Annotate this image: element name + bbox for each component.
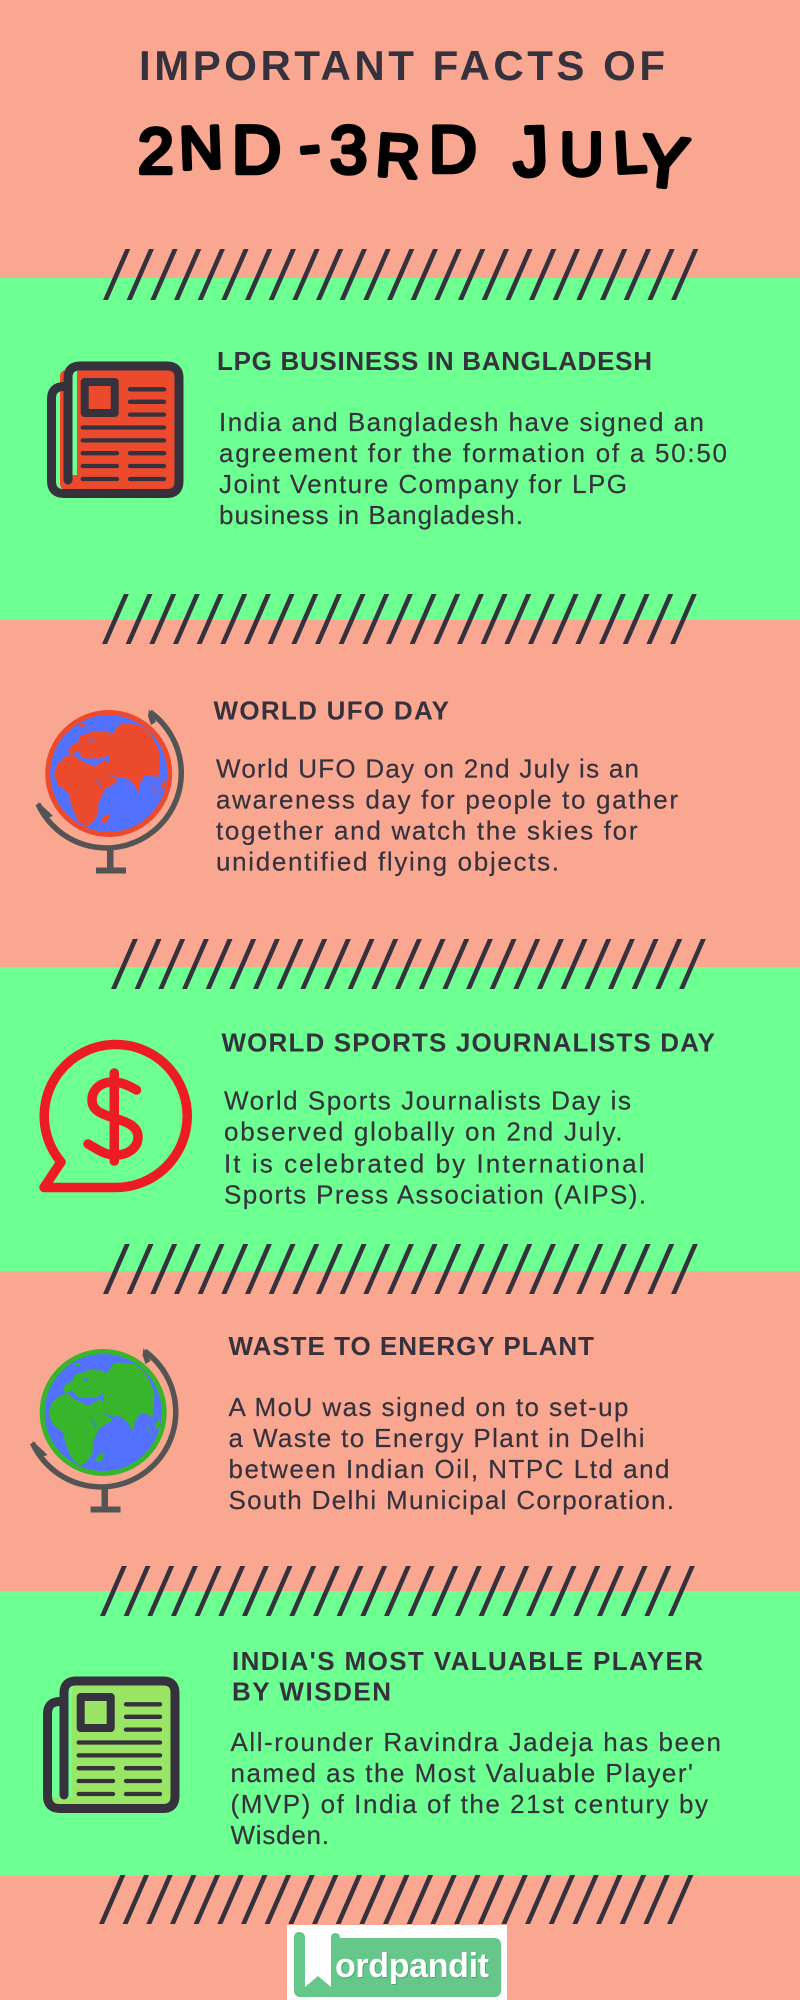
panel: Waste to Energy Plant [32,1331,674,1515]
slash divider 4 [114,1244,687,1294]
text block: India body: named as the Most Valuable Player' [230,1758,693,1788]
heading: World UFO Day: WORLD UFO DAY [214,696,449,726]
slash divider 2 [113,594,686,644]
title: 2nd-3rd July: N [178,114,224,182]
heading: India's Most Valuable Player by Wisden: BY WISDEN [232,1677,391,1707]
text block: LPG body: agreement for the formation of a 50:50 [219,438,727,468]
heading: LPG business in Bangladesh: LPG BUSINESS IN BANGLADESH [217,346,652,376]
text block: waste body: South Delhi Municipal Corporation. [228,1485,674,1515]
logo: Wordpandit: ordpandit [335,1947,489,1985]
title: 2nd-3rd July: D [232,112,281,188]
slash divider 6 [110,1875,683,1924]
text block: waste body [228,1392,674,1515]
text block: sports body [224,1085,646,1210]
heading: Waste to Energy Plant: WASTE TO ENERGY PLANT [228,1331,594,1361]
title: important facts of: IMPORTANT FACTS OF [139,42,665,89]
panel: World UFO Day [38,696,678,876]
text block: UFO body: World UFO Day on 2nd July is an [216,754,639,784]
text block: waste body: A MoU was signed on to set-up [228,1392,628,1422]
text block: India body: All-rounder Ravindra Jadeja has been [230,1727,721,1757]
text block: waste body: between Indian Oil, NTPC Ltd and [228,1454,670,1484]
panel: World Sports Journalists Day [44,1028,715,1210]
icon: newspaper orange [52,366,179,494]
slash divider 3 [122,939,695,989]
text block: India body: (MVP) of India of the 21st century by [230,1789,708,1819]
text block: waste body: a Waste to Energy Plant in Delhi [228,1423,644,1453]
icon: newspaper lime [48,1681,175,1808]
text block: LPG body [219,407,727,530]
slash divider 5 [111,1566,684,1616]
title: 2nd-3rd July: L [612,119,648,186]
panel: LPG business [52,346,727,530]
title: 2nd-3rd July: 3 [330,113,367,188]
slash divider 1 [114,249,687,300]
text block: UFO body: together and watch the skies for [216,816,638,846]
heading: World Sports Journalists Day: WORLD SPORTS JOURNALISTS DAY [222,1028,715,1058]
icon: dollar speech bubble [44,1045,187,1188]
title: 2nd-3rd July: - [296,110,323,181]
text block: India body [230,1727,721,1850]
text block: LPG body: India and Bangladesh have signed an [219,407,704,437]
icon: green globe [32,1348,176,1512]
title: 2nd-3rd July: U [560,121,603,188]
text block: sports body: observed globally on 2nd July. [224,1116,622,1146]
logo: Wordpandit [287,1925,507,2000]
title: 2nd-3rd July: D [429,112,477,186]
text block: UFO body: unidentified flying objects. [216,846,559,876]
heading: India's Most Valuable Player by Wisden [232,1646,703,1707]
title: 2nd-3rd July: Y [636,120,692,205]
text block: UFO body [216,754,678,876]
text block: LPG body: Joint Venture Company for LPG [219,469,627,499]
text block: India body: Wisden. [230,1820,329,1850]
title: 2nd-3rd July: 2 [138,115,174,187]
heading: India's Most Valuable Player by Wisden: INDIA'S MOST VALUABLE PLAYER [232,1646,703,1676]
logo: Wordpandit: ordpandit [336,1948,490,1986]
text block: LPG body: business in Bangladesh. [219,500,523,530]
icon: orange globe [38,709,181,874]
title: 2nd-3rd July: J [512,112,550,191]
text block: sports body: It is celebrated by International [224,1148,644,1178]
text block: UFO body: awareness day for people to gather [216,784,678,814]
text block: sports body: Sports Press Association (AIPS). [224,1180,646,1210]
panel: India's Most Valuable Player [48,1646,721,1850]
title: 2nd-3rd July: R [374,121,422,191]
text block: sports body: World Sports Journalists Day is [224,1085,631,1115]
